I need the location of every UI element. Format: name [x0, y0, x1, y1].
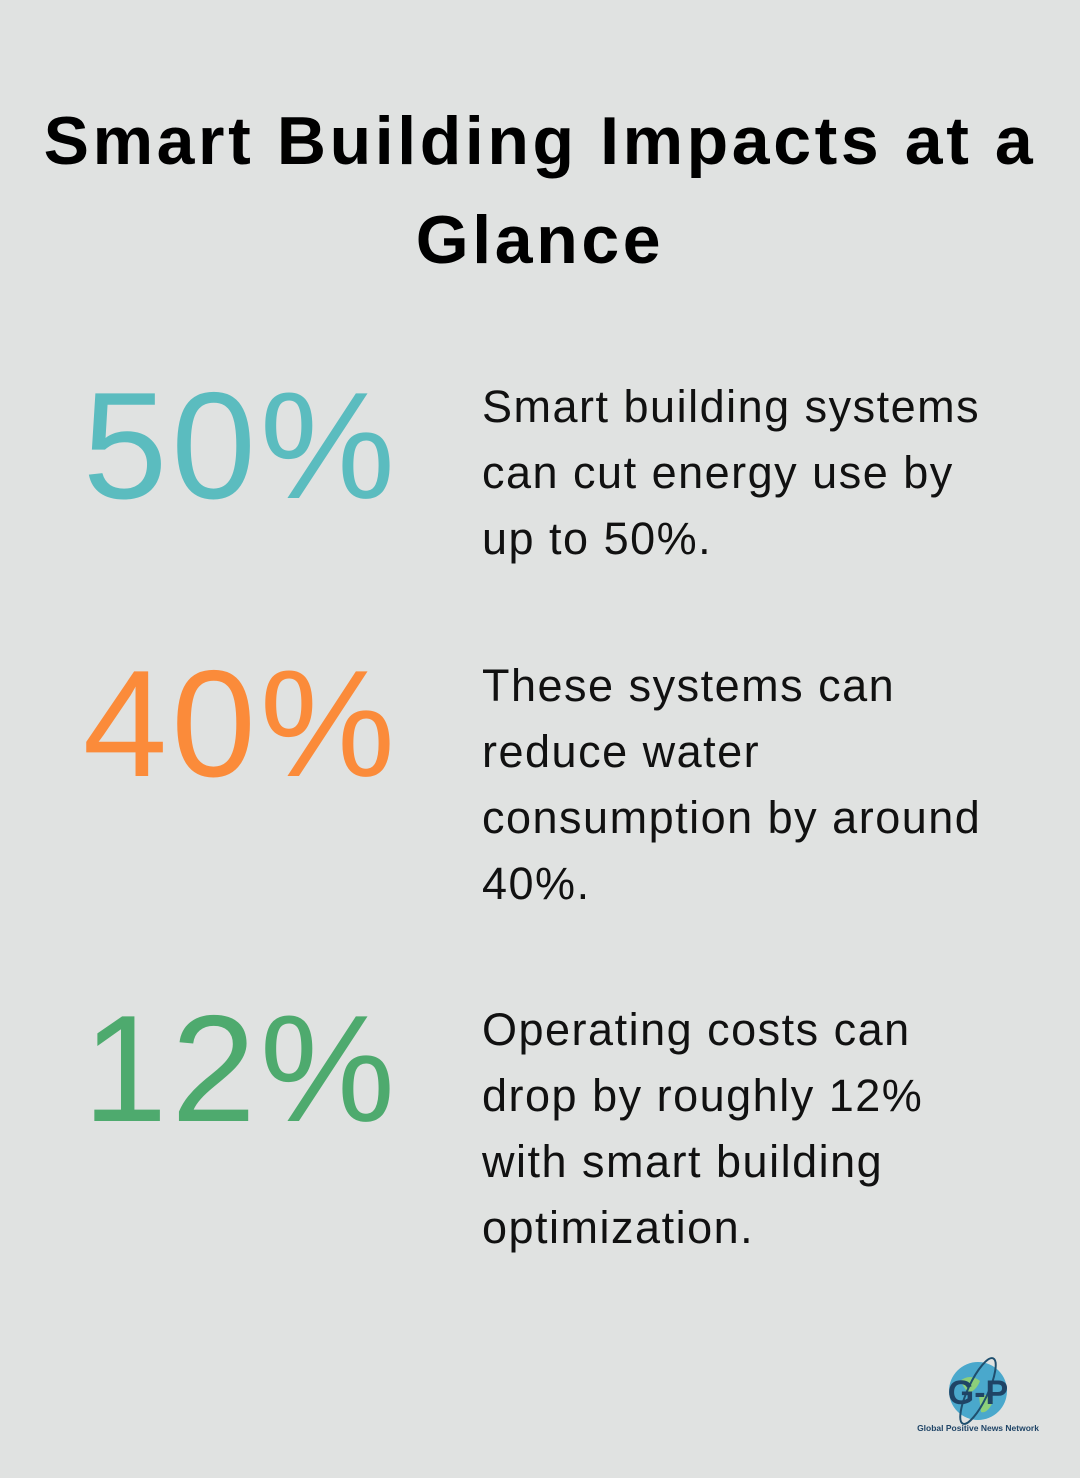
stat: water 40%: 40%: [83, 639, 399, 809]
stat: energy 50%: 50%: [83, 361, 399, 531]
text: costs: [482, 1004, 923, 1253]
logo: G-P: [948, 1374, 1008, 1412]
text: costs: with smart building: [482, 1136, 883, 1187]
text: costs: Operating costs can: [482, 1004, 911, 1055]
text: water: These systems can: [482, 660, 895, 711]
text: water: consumption by around: [482, 792, 981, 843]
text: energy: can cut energy use by: [482, 447, 954, 498]
text: costs: drop by roughly 12%: [482, 1070, 923, 1121]
text: energy: Smart building systems: [482, 381, 980, 432]
text: water: 40%.: [482, 858, 591, 909]
title: Glance: [416, 202, 664, 278]
title: Smart Building Impacts at a: [44, 103, 1036, 179]
text: energy: [482, 381, 980, 564]
text: water: [482, 660, 981, 909]
logo: [917, 1357, 1039, 1433]
title: [44, 103, 1036, 278]
logo: Global Positive News Network: [917, 1423, 1039, 1433]
text: water: reduce water: [482, 726, 760, 777]
text: costs: optimization.: [482, 1202, 754, 1253]
text: energy: up to 50%.: [482, 513, 712, 564]
stat: costs 12%: 12%: [83, 984, 399, 1154]
